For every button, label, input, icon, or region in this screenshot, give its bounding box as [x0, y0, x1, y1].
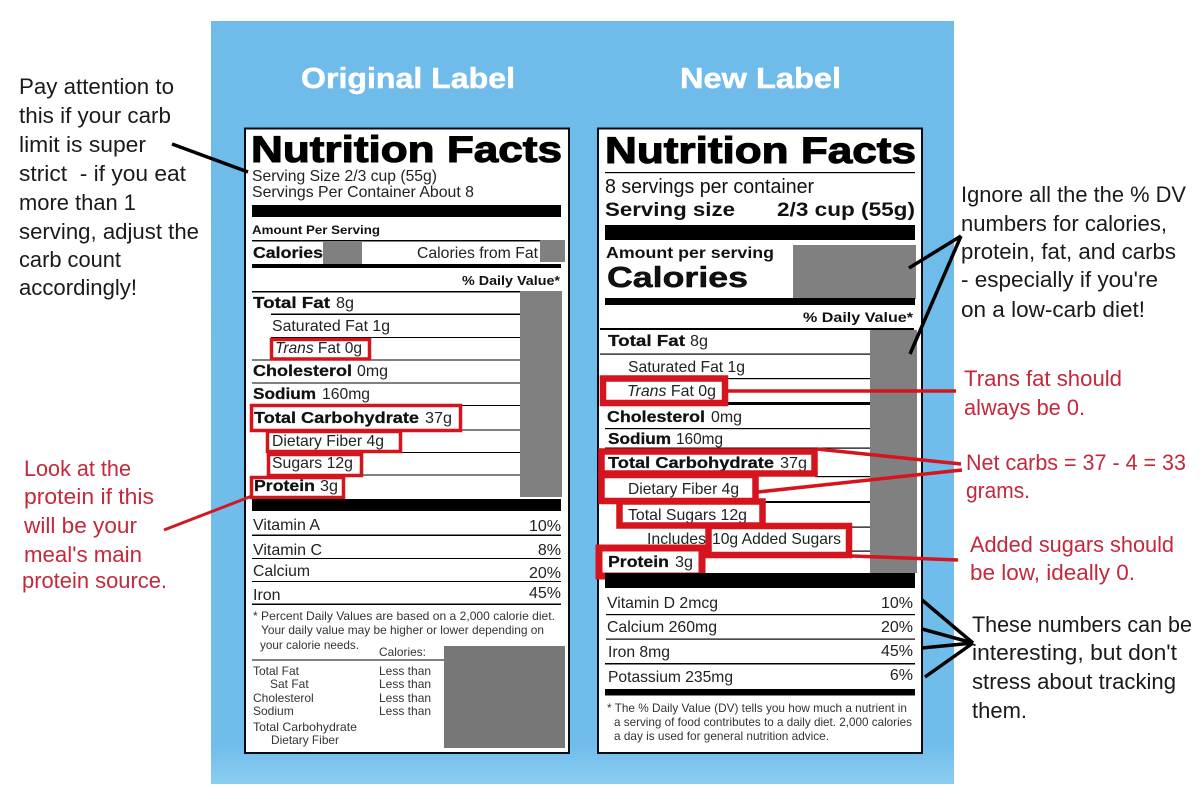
vitamins and minerals: Vitamin A: [253, 517, 320, 534]
nutrient rows: Sodium: [253, 386, 316, 403]
arrows: percent DV: [909, 236, 961, 354]
callout: ignore percent DV: protein, fat, and carbs: [961, 239, 1176, 264]
daily values table: Less than: [379, 704, 431, 718]
amount per serving: Amount Per Serving: [252, 225, 380, 237]
nutrient rows: Dietary Fiber 4g: [628, 481, 739, 498]
vitamins and minerals: 10%: [881, 595, 913, 612]
daily values table: Sat Fat: [270, 677, 309, 691]
daily values table: Dietary Fiber: [271, 733, 339, 747]
nutrient rows: 10g Added Sugars: [712, 531, 841, 548]
nutrient rows: Total Carbohydrate: [254, 410, 419, 427]
daily values table: Total Carbohydrate: [253, 720, 357, 734]
nutrient rows: 8g: [336, 295, 354, 312]
callout: serving size note: limit is super: [19, 132, 146, 157]
vitamins and minerals: 45%: [529, 585, 561, 602]
serving information: [605, 176, 915, 221]
daily values table: [252, 645, 565, 748]
nutrient rows: [252, 295, 520, 495]
callout: protein note: Look at the: [24, 456, 131, 481]
nutrient rows: Saturated Fat 1g: [628, 359, 745, 376]
vitamins and minerals: [252, 517, 561, 605]
nutrient rows: Total Fat: [253, 295, 331, 312]
callout: serving size note: carb count: [19, 247, 121, 272]
nutrient rows: Protein: [608, 554, 669, 571]
daily values table: Less than: [379, 677, 431, 691]
daily values table: Total Fat: [253, 664, 300, 678]
hidden percent column: [870, 330, 917, 573]
heading: New Label: New Label: [680, 63, 841, 95]
red highlight boxes: [599, 378, 849, 576]
footnote: [607, 701, 912, 743]
vitamins and minerals: 6%: [890, 667, 913, 684]
nutrient rows: 37g: [780, 455, 807, 472]
nutrient rows: Protein: [254, 478, 315, 495]
arrow: added sugars: [852, 556, 958, 560]
nutrient rows: Total Fat: [608, 333, 686, 350]
callout: vitamins and minerals note: interesting, but don't: [972, 640, 1177, 665]
arrow: protein: [164, 496, 252, 530]
amount per serving and calories: Amount per serving: [606, 245, 774, 262]
daily value heading: % Daily Value*: [462, 274, 560, 288]
calories row: Calories from Fat: [417, 245, 539, 262]
callout: protein note: [22, 456, 167, 593]
nutrient rows: [600, 333, 870, 571]
calories row: Calories: [253, 245, 323, 262]
serving information: Servings Per Container About 8: [252, 184, 474, 201]
footnote: * The % Daily Value (DV) tells you how much a nutrient in: [607, 701, 907, 715]
amount per serving and calories: Calories: [607, 262, 748, 294]
callout: net carbs: Net carbs = 37 - 4 = 33: [966, 450, 1186, 475]
serving information: 2/3 cup (55g): [777, 200, 915, 221]
daily value heading: % Daily Value*: [803, 309, 914, 325]
serving information: 8 servings per container: [605, 176, 814, 198]
callout: trans fat: [964, 366, 1122, 420]
amount per serving and calories: [606, 245, 916, 299]
footnote: your calorie needs.: [260, 638, 359, 652]
nutrient rows: 0mg: [711, 409, 742, 426]
arrows: net carbs: [758, 449, 962, 492]
callout: vitamins and minerals note: them.: [972, 698, 1027, 723]
daily values table: Calories:: [379, 645, 426, 659]
nutrient rows: Sodium: [608, 431, 671, 448]
label title: Nutrition Facts: [605, 129, 916, 171]
panel: new nutrition label: [598, 128, 922, 753]
nutrient rows: Cholesterol: [607, 409, 705, 426]
callout: serving size note: [19, 74, 199, 300]
footnote: a serving of food contributes to a daily diet. 2,000 calories: [614, 715, 912, 729]
callout: protein note: will be your: [23, 513, 137, 538]
footnote: a day is used for general nutrition advice.: [614, 729, 829, 743]
label title: Nutrition Facts: [251, 128, 562, 170]
arrow: serving size: [172, 144, 248, 172]
nutrient rows: Total Carbohydrate: [608, 455, 774, 472]
nutrient rows: Sugars 12g: [272, 455, 353, 472]
nutrient rows: Trans Fat 0g: [627, 383, 716, 400]
daily values table: Cholesterol: [253, 691, 314, 705]
hidden percent column: [520, 291, 562, 497]
callout: protein note: meal's main: [24, 542, 142, 567]
nutrient rows: 0mg: [357, 363, 388, 380]
daily values table: Less than: [379, 664, 431, 678]
callout: vitamins and minerals note: These numbers can be: [972, 612, 1192, 637]
serving information: Serving Size 2/3 cup (55g): [252, 168, 437, 185]
daily values table: Sodium: [253, 704, 294, 718]
callout: trans fat: always be 0.: [964, 395, 1085, 420]
callout: serving size note: strict - if you eat: [19, 161, 186, 186]
callout: serving size note: this if your carb: [19, 103, 171, 128]
vitamins and minerals: 20%: [529, 565, 561, 582]
callout: serving size note: more than 1: [19, 190, 136, 215]
nutrient rows: 3g: [675, 554, 693, 571]
callout: added sugars: Added sugars should: [970, 532, 1174, 557]
callout: ignore percent DV: numbers for calories,: [961, 211, 1167, 236]
nutrient rows: Total Sugars 12g: [628, 507, 747, 524]
panel: blue background: [211, 21, 954, 784]
vitamins and minerals: Vitamin D 2mcg: [607, 595, 718, 612]
footnote: Your daily value may be higher or lower depending on: [261, 623, 544, 637]
nutrient rows: 8g: [690, 333, 708, 350]
callout: trans fat: Trans fat should: [964, 366, 1122, 391]
callout: protein note: protein if this: [24, 484, 154, 509]
panel: original nutrition label: [245, 128, 569, 753]
callout: net carbs: grams.: [966, 478, 1030, 503]
nutrient rows: 160mg: [322, 386, 370, 403]
callout: serving size note: serving, adjust the: [19, 219, 199, 244]
callout: added sugars: [970, 532, 1174, 585]
vitamins and minerals: Calcium 260mg: [607, 619, 717, 636]
red highlight boxes: [252, 340, 460, 498]
footnote: * Percent Daily Values are based on a 2,000 calorie diet.: [253, 609, 555, 623]
nutrient rows: 37g: [425, 410, 452, 427]
heading: Original Label: Original Label: [301, 63, 515, 95]
serving information: [252, 168, 474, 201]
callout: ignore percent DV: [961, 182, 1186, 322]
vitamins and minerals: Calcium: [253, 563, 310, 580]
nutrient rows: Includes: [647, 531, 706, 548]
arrows: vitamins and minerals: [922, 600, 973, 677]
callout: serving size note: Pay attention to: [19, 74, 174, 99]
calories row: [253, 240, 565, 264]
vitamins and minerals: Potassium 235mg: [608, 669, 733, 686]
nutrient rows: Dietary Fiber 4g: [272, 433, 384, 450]
callout: vitamins and minerals note: stress about tracking: [972, 669, 1176, 694]
vitamins and minerals: Iron: [253, 587, 281, 604]
nutrient rows: 160mg: [676, 431, 723, 448]
callout: serving size note: accordingly!: [19, 275, 137, 300]
serving information: Serving size: [605, 200, 735, 221]
vitamins and minerals: 10%: [529, 518, 561, 535]
arrow: trans fat: [728, 389, 956, 393]
vitamins and minerals: Vitamin C: [253, 542, 322, 559]
nutrient rows: Saturated Fat 1g: [272, 318, 390, 335]
footnote: [253, 609, 555, 652]
vitamins and minerals: 20%: [881, 619, 913, 636]
callout: ignore percent DV: on a low-carb diet!: [961, 297, 1145, 322]
callout: protein note: protein source.: [22, 568, 167, 593]
callout: ignore percent DV: - especially if you're: [961, 267, 1158, 292]
vitamins and minerals: 8%: [538, 542, 561, 559]
vitamins and minerals: Iron 8mg: [608, 644, 670, 661]
callout: net carbs: [966, 450, 1186, 503]
vitamins and minerals: 45%: [881, 643, 913, 660]
callout: vitamins and minerals note: [972, 612, 1192, 723]
daily values table: Less than: [379, 691, 431, 705]
nutrient rows: 3g: [320, 478, 338, 495]
vitamins and minerals: [605, 595, 915, 686]
nutrient rows: Cholesterol: [253, 363, 352, 380]
nutrient rows: Trans Fat 0g: [275, 340, 362, 357]
callout: ignore percent DV: Ignore all the the % DV: [961, 182, 1186, 207]
callout: added sugars: be low, ideally 0.: [970, 560, 1135, 585]
